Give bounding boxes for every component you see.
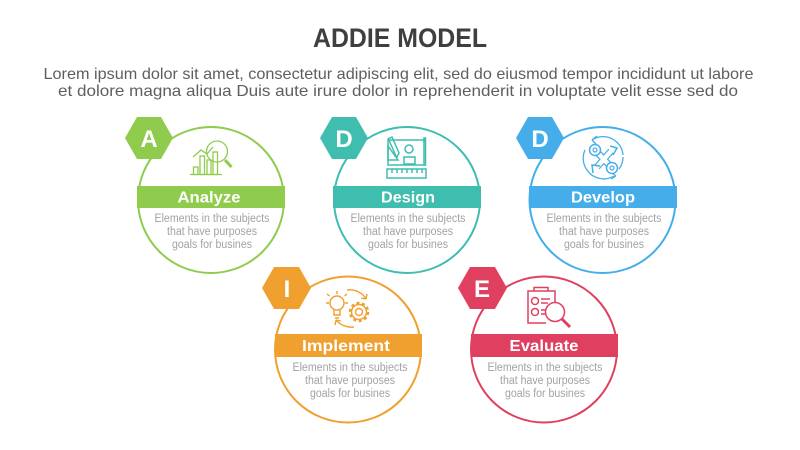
icon: light bulb and gear cycle	[326, 290, 368, 327]
band: analyze	[137, 186, 285, 208]
hexagon: I	[262, 267, 311, 309]
panel: develop	[516, 117, 677, 273]
text: design description: Elements in the subjects	[350, 213, 466, 225]
hexagon: D	[320, 117, 368, 159]
hexagon: A: A	[140, 126, 158, 153]
text: evaluate description: Elements in the subjects	[488, 362, 603, 374]
icon: chart with magnifier	[190, 141, 232, 174]
icon: crossed wrenches with arrows	[583, 136, 623, 179]
text: evaluate description	[488, 362, 603, 400]
text: develop description	[546, 213, 662, 251]
text: implement description: goals for busines	[310, 388, 390, 400]
text: evaluate description: goals for busines	[505, 388, 585, 400]
text: develop description: Elements in the subjects	[546, 213, 662, 225]
hexagon: D	[516, 117, 564, 159]
hexagon: A	[125, 117, 173, 159]
text: develop description: goals for busines	[564, 239, 644, 251]
band: evaluate	[471, 334, 618, 357]
text: implement description: Elements in the subjects	[292, 362, 408, 374]
text: design description	[350, 213, 466, 251]
band: design	[333, 186, 481, 208]
title: ADDIE MODEL	[313, 23, 487, 53]
text: analyze description: Elements in the subjects	[154, 213, 270, 225]
hexagon: D: D	[531, 126, 549, 153]
hexagon: I: I	[284, 276, 290, 303]
text: analyze description: goals for busines	[172, 239, 252, 251]
heading: evaluate: Evaluate	[510, 338, 579, 355]
subtitle text: et dolore magna aliqua Duis aute irure dolor in reprehenderit in voluptate velit esse sed do	[58, 83, 738, 100]
band: develop	[529, 186, 677, 208]
text: implement description	[292, 362, 408, 400]
panel: implement	[262, 267, 422, 422]
heading: implement: Implement	[302, 338, 391, 355]
band: implement	[275, 334, 422, 357]
panel: evaluate	[458, 267, 618, 422]
heading: design: Design	[381, 190, 435, 206]
panel: analyze	[125, 117, 285, 273]
subtitle text	[44, 66, 754, 100]
hexagon: E	[458, 267, 507, 309]
text: analyze description: that have purposes	[167, 226, 257, 238]
heading: develop: Develop	[571, 190, 635, 206]
hexagon: D: D	[335, 126, 353, 153]
subtitle text: Lorem ipsum dolor sit amet, consectetur adipiscing elit, sed do eiusmod tempor incididunt ut labore	[44, 66, 754, 83]
heading: analyze: Analyze	[178, 190, 241, 206]
text: evaluate description: that have purposes	[500, 375, 590, 387]
icon: clipboard with magnifier	[528, 288, 570, 327]
text: design description: that have purposes	[363, 226, 453, 238]
text: develop description: that have purposes	[559, 226, 649, 238]
text: design description: goals for busines	[368, 239, 448, 251]
text: implement description: that have purposes	[305, 375, 395, 387]
icon: drafting tools	[387, 137, 426, 178]
panel: design	[320, 117, 481, 273]
text: analyze description	[154, 213, 270, 251]
hexagon: E: E	[474, 276, 490, 303]
